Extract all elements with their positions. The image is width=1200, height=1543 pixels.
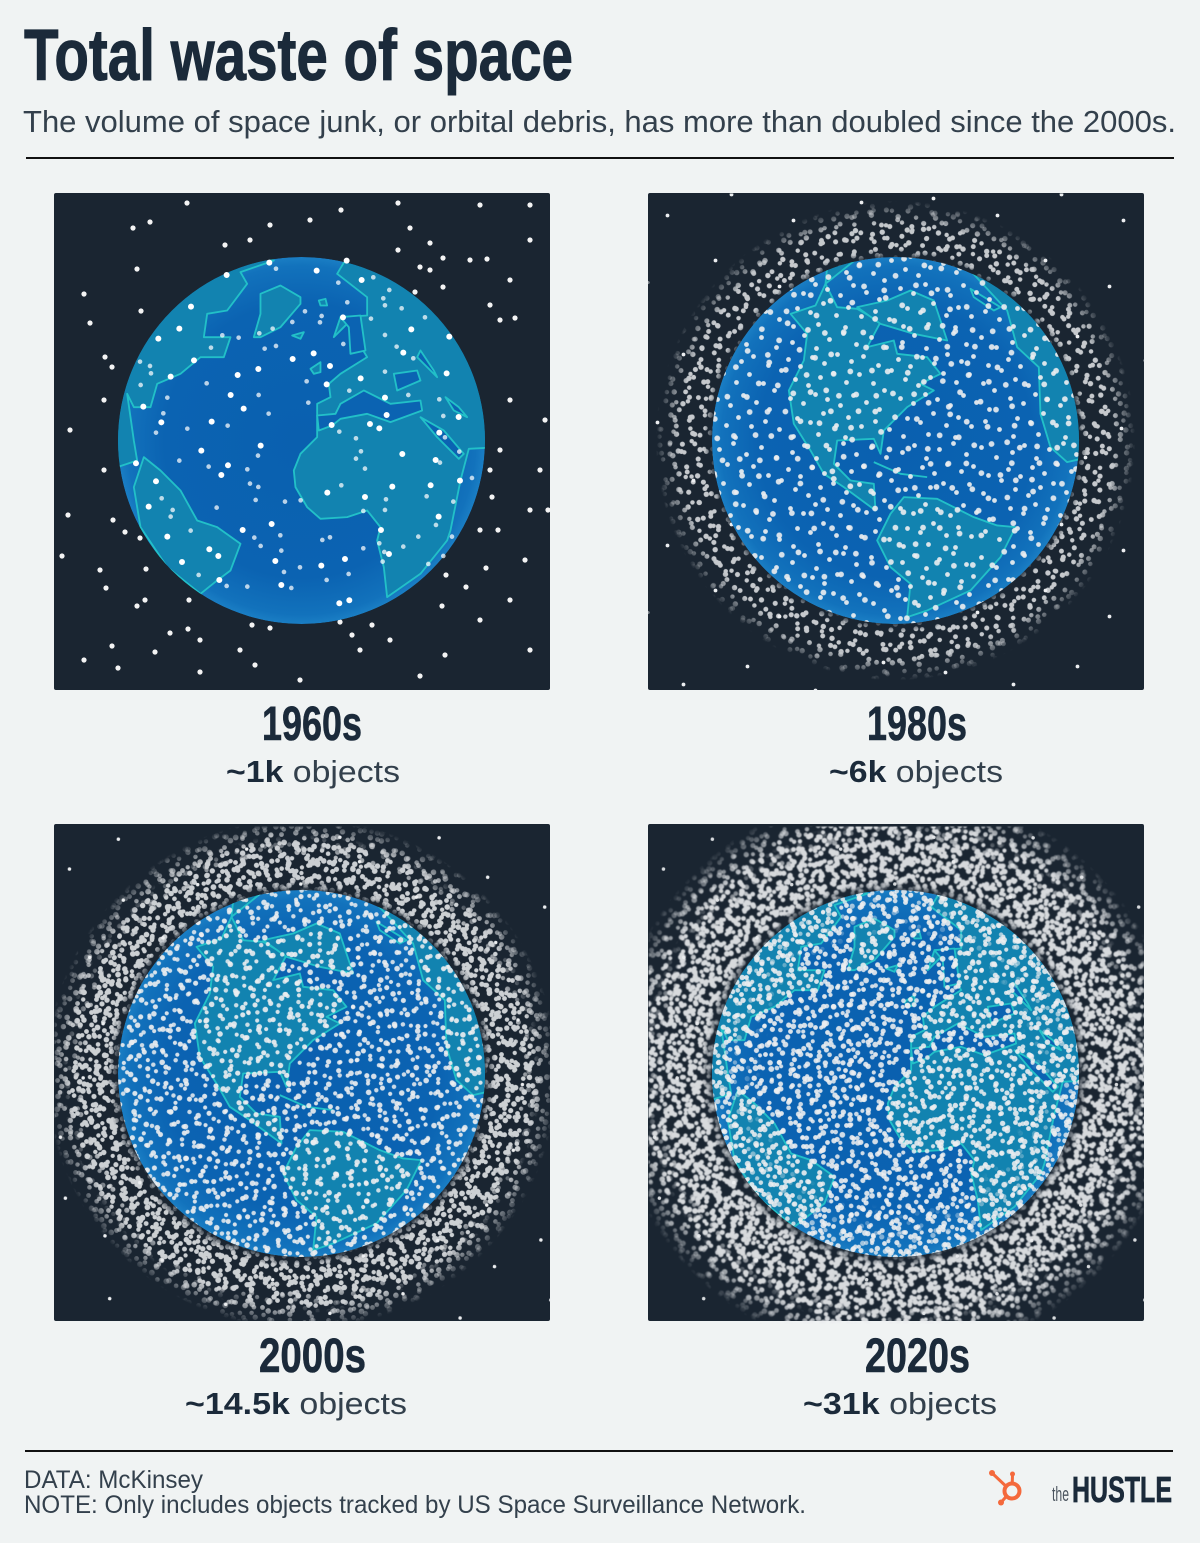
scattered debris outside globe (62, 203, 548, 680)
caption: 1960s: ~1k objects (226, 754, 400, 789)
footer: source and note: NOTE: Only includes objects tracked by US Space Surveillance Network. (24, 1491, 806, 1519)
debris over globe (136, 261, 472, 603)
caption: 2000s: 2000s (259, 1330, 366, 1383)
title: Total waste of space (24, 16, 573, 96)
earth: Americas view (712, 257, 1079, 624)
panel: 2000s globe (54, 824, 550, 1321)
debris ring (657, 202, 1134, 679)
subtitle: The volume of space junk, or orbital debris, has more than doubled since the 2000s. (23, 104, 1176, 139)
logo: the Hustle (1052, 1469, 1172, 1510)
footer: source and note (24, 1466, 806, 1519)
panel: 2020s globe (648, 824, 1144, 1321)
caption: 2000s: ~14.5k objects (185, 1386, 407, 1421)
caption: 2020s: ~31k objects (803, 1386, 997, 1421)
earth: Atlantic view (712, 890, 1079, 1257)
scattered debris (648, 194, 1144, 690)
caption: 2020s: 2020s (865, 1330, 970, 1383)
scattered debris (652, 835, 1144, 1320)
caption: 1980s (829, 698, 1003, 789)
scattered debris (58, 835, 550, 1320)
footer: source and note: DATA: McKinsey (24, 1466, 203, 1494)
debris over globe (706, 884, 1086, 1264)
earth: Atlantic view (97, 240, 500, 624)
debris ring (54, 826, 550, 1321)
debris over globe (706, 250, 1086, 630)
earth: Americas view (118, 890, 485, 1257)
panel: 1980s globe (648, 193, 1144, 690)
icon: HubSpot sprocket (989, 1470, 1020, 1506)
debris ring (648, 826, 1144, 1321)
debris over globe (112, 884, 492, 1264)
caption: 1980s: 1980s (867, 698, 967, 751)
caption: 1980s: ~6k objects (829, 754, 1003, 789)
caption: 2020s (803, 1330, 997, 1421)
caption: 1960s (226, 698, 400, 789)
panel: 1960s globe (54, 193, 550, 690)
caption: 2000s (185, 1330, 407, 1421)
logo: the Hustle: the (1052, 1484, 1069, 1506)
caption: 1960s: 1960s (262, 698, 362, 751)
